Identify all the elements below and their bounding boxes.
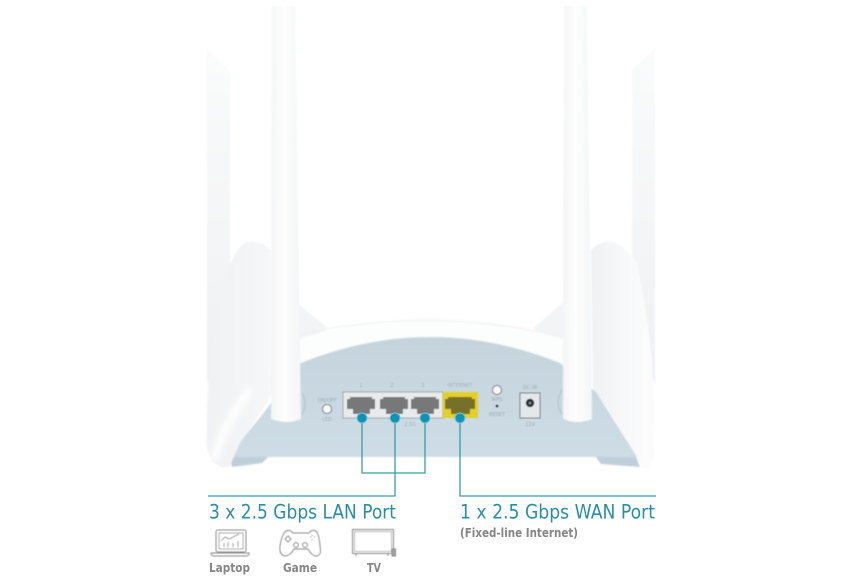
rim highlight line: [300, 320, 560, 336]
WAN port block: [443, 392, 478, 418]
label: Game: Game: [283, 560, 317, 575]
port labels on panel: 2: [390, 383, 394, 389]
body shell: [296, 318, 566, 372]
heading: LAN: 3 x 2.5 Gbps LAN Port: [209, 500, 396, 524]
icon: game controller: [280, 530, 320, 556]
router illustration: [207, 6, 655, 468]
port labels on panel: 2.5G: [404, 422, 416, 428]
right fin: [591, 242, 655, 468]
port labels on panel: [359, 383, 473, 428]
WPS and reset: [489, 386, 506, 418]
LAN port 3: [411, 397, 439, 414]
feet: [230, 457, 640, 467]
icon: TV: [352, 530, 396, 556]
left fin highlight: [214, 390, 250, 460]
back shell wedges: [296, 302, 564, 345]
heading: WAN: 1 x 2.5 Gbps WAN Port: [460, 500, 655, 524]
antenna hinges: [302, 390, 562, 414]
port markers: [357, 413, 465, 423]
LAN port 2: [380, 397, 408, 414]
DC power jack: 12V: [525, 422, 535, 428]
label: Laptop: Laptop: [209, 560, 250, 575]
port labels on panel: 1: [359, 383, 363, 389]
WAN note: (Fixed-line Internet): [460, 526, 578, 540]
on/off LED button: [317, 398, 337, 423]
DC power jack: [520, 385, 540, 428]
icon: laptop: [211, 530, 249, 556]
rear panel: [228, 337, 637, 457]
port labels on panel: 3: [421, 383, 425, 389]
front right antenna: [563, 6, 592, 422]
LAN port 1: [347, 397, 375, 414]
on/off LED button: ON/OFF: [317, 398, 337, 404]
front left antenna: [271, 6, 301, 422]
WPS and reset: WPS: [491, 397, 503, 403]
WPS and reset: RESET: [489, 412, 506, 418]
on/off LED button: LED: [322, 417, 332, 423]
DC power jack: DC IN: [523, 385, 537, 391]
left fin: [207, 242, 271, 467]
port labels on panel: INTERNET: [448, 383, 473, 389]
LAN port block: [343, 392, 443, 418]
rear right antenna: [632, 48, 655, 385]
connector lines: [208, 418, 656, 496]
rear left antenna: [207, 49, 230, 385]
label: TV: TV: [367, 560, 381, 575]
